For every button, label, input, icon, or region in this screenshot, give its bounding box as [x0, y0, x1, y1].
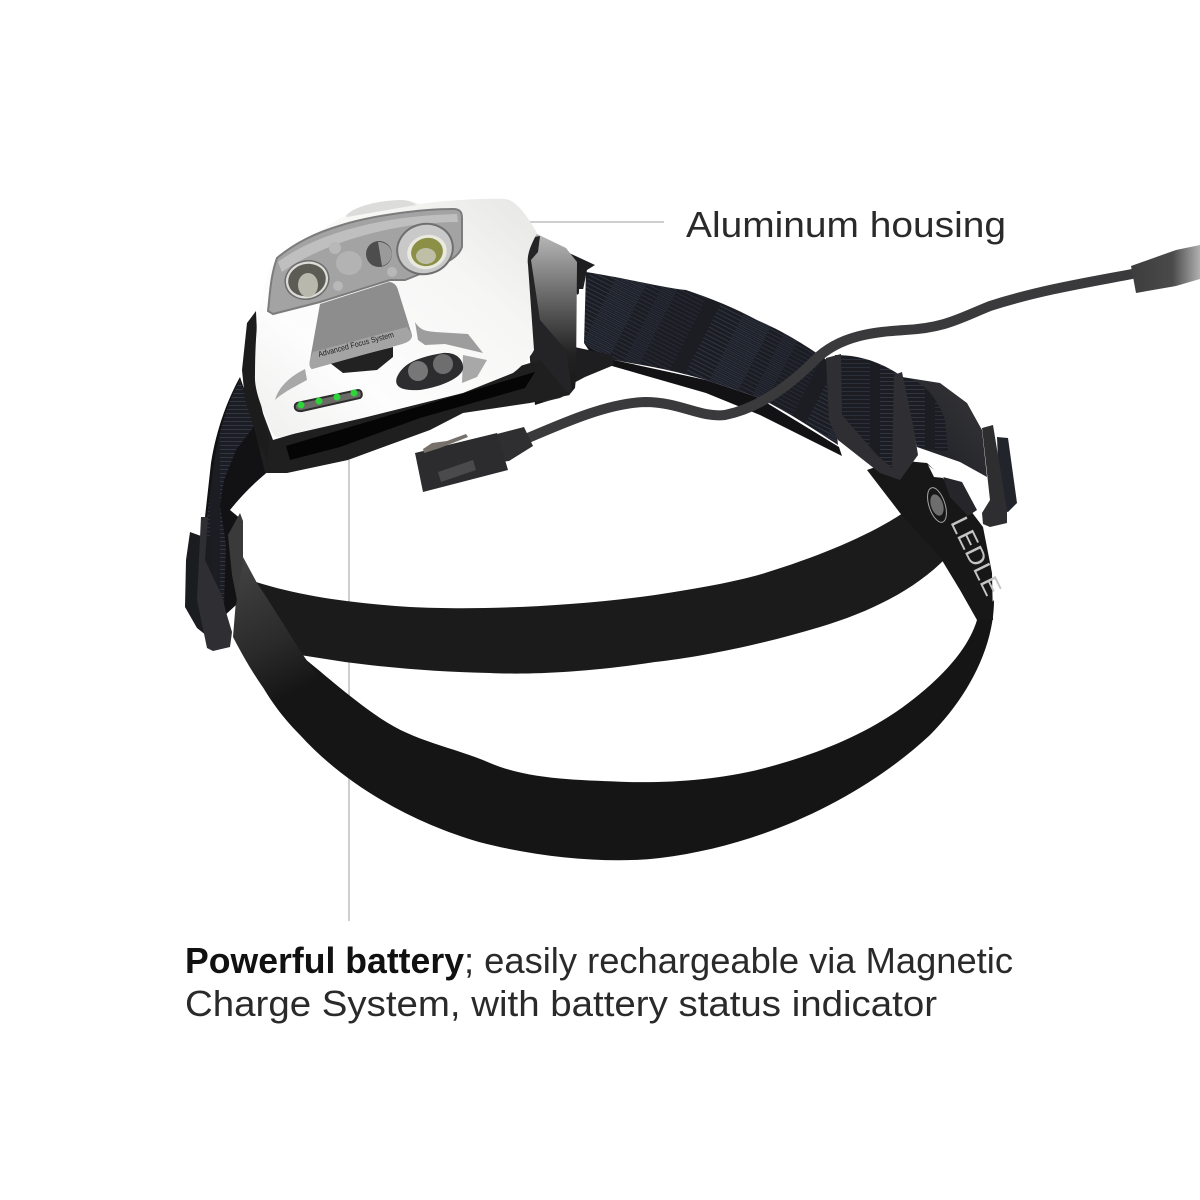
- strap clip: [565, 252, 614, 385]
- lens glare: [416, 248, 436, 264]
- black underside cavity: [286, 372, 535, 460]
- end roll: [943, 477, 977, 516]
- panel highlight: [278, 214, 458, 272]
- button left: [408, 361, 428, 381]
- slider lower band: [310, 327, 412, 369]
- small sensor dots: [329, 242, 397, 291]
- lens ring: [281, 256, 333, 304]
- strap junction piece left: [233, 557, 340, 715]
- strap under edge: [584, 343, 842, 456]
- strap middle section: [835, 355, 900, 470]
- logo dot: [928, 493, 946, 517]
- bracket front edge: [521, 236, 572, 402]
- charging cable: [415, 245, 1200, 492]
- bracket gray panel: [523, 234, 577, 405]
- end buckle: [982, 425, 1007, 527]
- second line: Charge System, with battery status indicator: [185, 983, 937, 1024]
- underside base: [243, 340, 570, 473]
- first line: ; easily rechargeable via Magnetic: [464, 940, 1013, 981]
- lens ring: [391, 218, 459, 280]
- right lens: [391, 218, 459, 280]
- battery status indicator: [295, 390, 362, 411]
- white aluminum housing: [255, 199, 537, 437]
- right gray accent: [415, 322, 483, 353]
- lower head strap: [243, 590, 994, 860]
- connector pins: [423, 434, 468, 453]
- sensor window dark: [366, 241, 392, 267]
- bold lead-in: Powerful battery: [185, 940, 464, 981]
- strap folded section: [902, 377, 987, 477]
- left bracket: [242, 311, 269, 462]
- left buckle front: [197, 517, 232, 651]
- logo ring: [924, 485, 950, 525]
- grey inner strap: [228, 513, 243, 600]
- sensor window grey: [336, 251, 362, 275]
- magnetic connector: [415, 427, 533, 492]
- lower right accent: [462, 355, 487, 383]
- headlamp body: [242, 199, 614, 473]
- left gray accent: [275, 369, 307, 400]
- lens bezel: [403, 230, 451, 274]
- green LEDs: [298, 390, 358, 408]
- leader line: battery: [348, 460, 350, 921]
- strap front section: [584, 272, 838, 445]
- top bump shade: [346, 200, 416, 217]
- indicator bar: [295, 390, 362, 411]
- sliding buckle: [826, 354, 918, 480]
- strap clip slot: [579, 289, 584, 344]
- focus wheel: [330, 347, 393, 373]
- upper head strap: [256, 513, 947, 674]
- lens glare: [298, 273, 318, 297]
- lens LED: [408, 234, 446, 270]
- end buckle back: [997, 437, 1017, 512]
- label: powerful battery: [185, 940, 1013, 1024]
- strap texture left: [206, 380, 255, 605]
- logo text: LEDLE: [945, 512, 1007, 600]
- sensor window highlight: [378, 242, 392, 266]
- strap fold texture: [902, 377, 948, 452]
- cable far connector: [1131, 245, 1200, 293]
- lens panel: [268, 209, 462, 314]
- leader line: aluminum housing: [525, 221, 664, 223]
- strap gap highlight: [928, 465, 944, 478]
- upper woven strap: [584, 272, 1017, 527]
- connector neck: [497, 427, 533, 462]
- power button housing: [396, 353, 463, 390]
- left buckle back: [185, 532, 212, 640]
- focus slider: [310, 282, 412, 369]
- label: aluminum housing: Aluminum housing: [686, 204, 1006, 245]
- connector slot: [438, 460, 476, 482]
- lens LED: [285, 260, 329, 300]
- woven strap left: [199, 377, 270, 618]
- rear strap with logo: [867, 460, 993, 620]
- button right: [433, 354, 453, 374]
- connector body: [415, 433, 508, 492]
- brand label: Advanced Focus System: [317, 330, 395, 359]
- cable line: [528, 274, 1132, 438]
- headband: [185, 377, 1007, 860]
- slider plate: [310, 282, 412, 369]
- left lens: [281, 256, 333, 304]
